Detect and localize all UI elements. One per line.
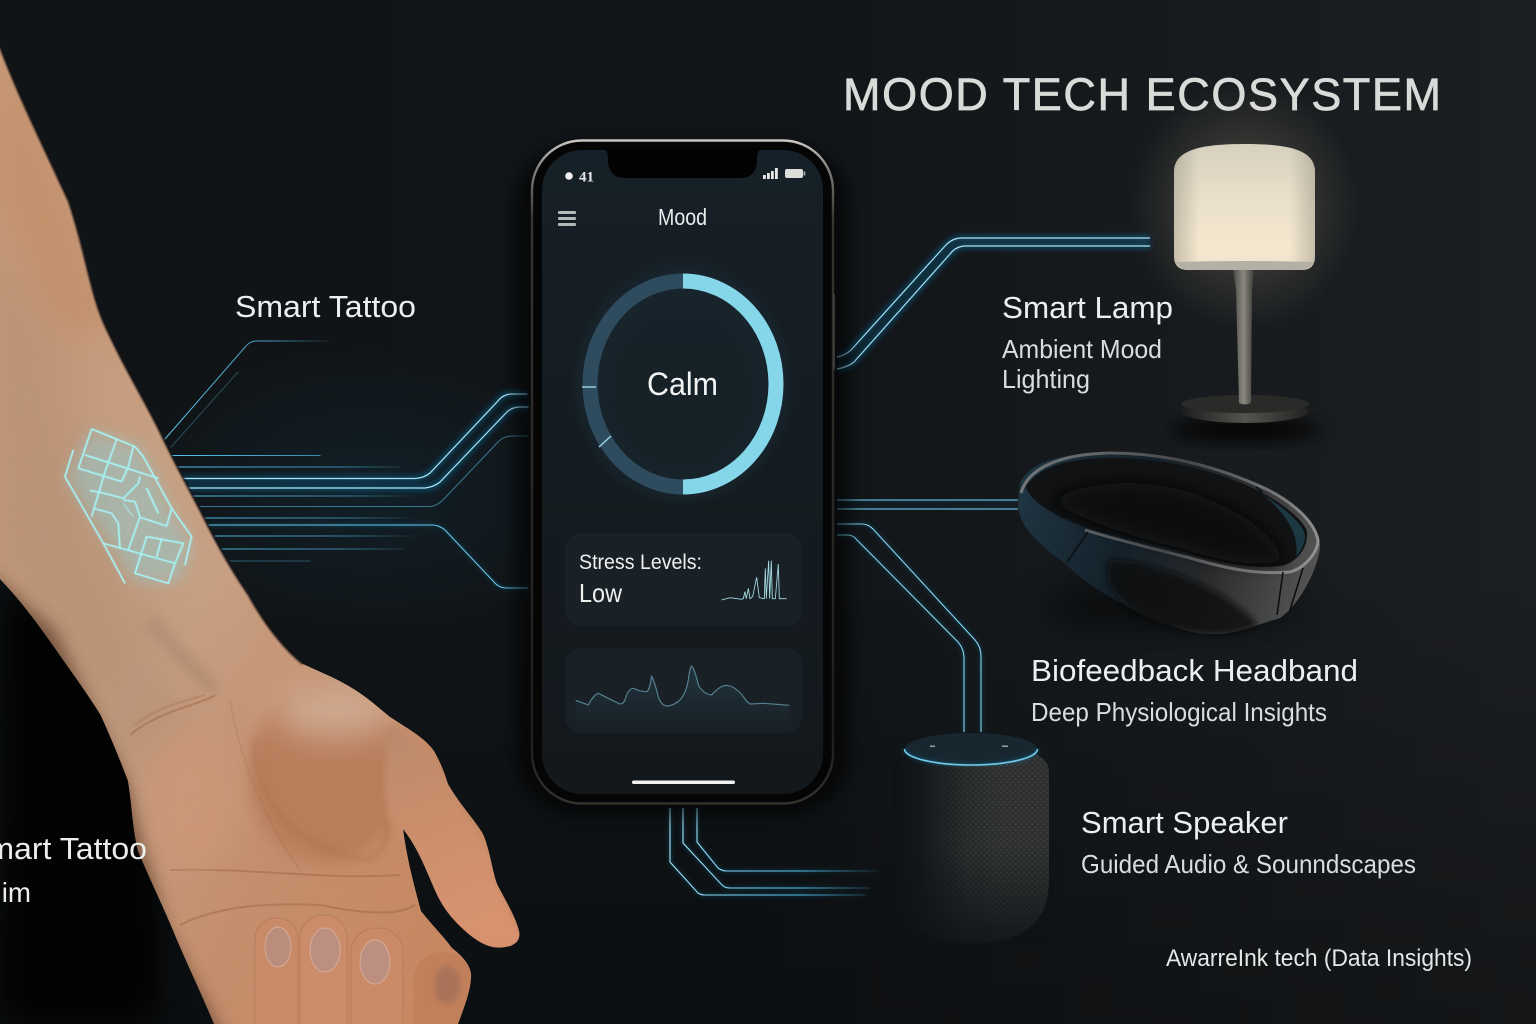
wave chart xyxy=(576,666,789,727)
label: smart speaker xyxy=(1081,805,1416,879)
stress value: Low xyxy=(579,578,622,608)
fingers xyxy=(255,915,472,1024)
speaker base shading xyxy=(892,745,1054,950)
speaker body shading xyxy=(892,745,1000,950)
home indicator xyxy=(632,780,735,784)
speaker top disc xyxy=(904,733,1038,765)
smart speaker xyxy=(892,733,1054,950)
connector lines: phone bottom to speaker xyxy=(670,808,880,895)
finger 3 xyxy=(351,928,403,1024)
status bar left xyxy=(565,170,594,186)
phone shadow xyxy=(515,145,850,815)
arm hair edge xyxy=(0,47,303,664)
headband segment seams xyxy=(1067,487,1303,615)
headband inner teal lining xyxy=(1262,494,1305,556)
lamp stem xyxy=(1233,268,1254,404)
speaker description: Guided Audio & Sounndscapes xyxy=(1081,849,1416,879)
tattoo glow xyxy=(65,429,192,583)
connector lines: phone to lamp xyxy=(837,238,1150,369)
menu icon xyxy=(558,211,576,226)
smart lamp xyxy=(1170,144,1320,442)
connector lines: tattoo to phone xyxy=(165,341,528,588)
lamp description line 2: Lighting xyxy=(1002,364,1090,394)
headband inner xyxy=(1026,458,1307,567)
headband sensor pad xyxy=(1107,560,1258,634)
side buttons xyxy=(833,294,835,370)
finger 4 xyxy=(414,952,472,1024)
status bar left: 41 xyxy=(579,170,594,186)
screen title: Mood xyxy=(658,204,707,230)
headband name: Biofeedback Headband xyxy=(1031,653,1358,688)
lamp shade edge shading xyxy=(1174,144,1315,270)
lamp shade rim xyxy=(1176,261,1314,270)
biofeedback headband xyxy=(1018,452,1320,634)
lamp description line 1: Ambient Mood xyxy=(1002,334,1162,364)
tattoo circuit lines xyxy=(65,429,192,583)
stress label: Stress Levels: xyxy=(579,551,702,574)
speaker name: Smart Speaker xyxy=(1081,805,1288,840)
speaker light ring xyxy=(904,749,1038,765)
speaker buttons xyxy=(930,746,1008,747)
line dropping to phone xyxy=(208,525,528,588)
label: smart tattoo: Smart Tattoo xyxy=(235,289,416,324)
footer credit: AwarreInk tech (Data Insights) xyxy=(1166,945,1472,972)
stress sparkline xyxy=(722,561,787,600)
label: biofeedback headband xyxy=(1031,653,1358,727)
bright line to phone, upper xyxy=(180,394,527,478)
label: smart lamp xyxy=(1002,290,1173,394)
diagonal line to Smart Tattoo label xyxy=(165,341,335,439)
stress card xyxy=(565,533,802,626)
thumb xyxy=(385,725,525,948)
dim line rising to phone xyxy=(200,436,528,506)
forearm shading xyxy=(0,40,225,1024)
headband shadow xyxy=(1045,579,1305,631)
palm folds xyxy=(130,695,415,925)
speaker body xyxy=(897,745,1049,943)
headband top rim xyxy=(1021,453,1318,573)
bright line to phone, second xyxy=(185,407,528,488)
faint diagonal trace xyxy=(171,372,238,447)
wave card xyxy=(565,648,802,733)
phone body xyxy=(532,140,833,804)
headband description: Deep Physiological Insights xyxy=(1031,697,1327,727)
headband inner shadow xyxy=(1050,483,1285,564)
phone xyxy=(515,140,850,815)
smart tattoo xyxy=(65,429,192,583)
clipped label: smart tattoo left xyxy=(0,831,147,908)
status bar right icons xyxy=(763,168,805,179)
thumb mound xyxy=(249,678,401,863)
finger 2 xyxy=(300,915,347,1024)
connector lines: phone to headband xyxy=(837,500,1018,509)
lamp base xyxy=(1181,395,1309,423)
arm and hand xyxy=(0,0,540,1024)
lamp shade xyxy=(1174,144,1315,270)
lamp shadow xyxy=(1170,418,1320,442)
mood ring xyxy=(570,260,796,508)
finger 1 xyxy=(255,918,298,1024)
lamp name: Smart Lamp xyxy=(1002,290,1173,325)
headband body xyxy=(1018,452,1320,634)
connector lines: phone to speaker xyxy=(837,524,981,732)
fading horizontal traces xyxy=(170,456,425,561)
mood status: Calm xyxy=(647,366,718,402)
title: MOOD TECH ECOSYSTEM xyxy=(843,69,1441,120)
notch xyxy=(604,148,762,178)
palm highlight xyxy=(135,763,195,870)
screen xyxy=(542,150,823,794)
